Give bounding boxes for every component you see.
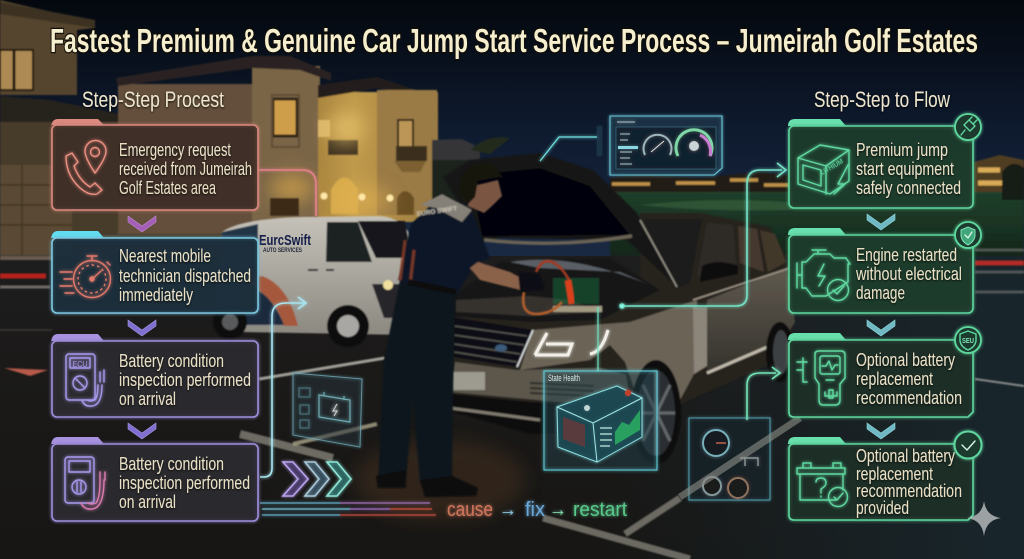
headlight bbox=[535, 330, 608, 355]
step text: Battery condition bbox=[119, 351, 224, 371]
van logo: AUTO SERVICES bbox=[263, 247, 302, 254]
road light streaks bbox=[0, 250, 1024, 559]
icon: engine with check bbox=[797, 250, 850, 300]
connector: hood to diagnostics panel bbox=[540, 137, 597, 161]
sparkle watermark bbox=[967, 501, 1001, 536]
icon: ECU multimeter bbox=[66, 354, 104, 406]
panel: optional battery recommendation provided bbox=[788, 432, 982, 520]
panel: optional battery replacement with scan tool bbox=[788, 327, 981, 417]
left column heading: Step-Step Procest bbox=[82, 87, 225, 112]
flow caption: cause fix restart: → bbox=[499, 498, 517, 521]
data stream lines bbox=[260, 503, 436, 515]
range rover with raised hood bbox=[412, 153, 795, 464]
connector: gauges to optional battery card bbox=[747, 367, 780, 420]
badge: plug bbox=[955, 114, 981, 140]
step text: Engine restarted bbox=[856, 245, 957, 265]
grille bbox=[452, 317, 533, 367]
arrow: right step 2 to 3 bbox=[867, 320, 895, 336]
panel: emergency request bbox=[51, 119, 258, 210]
icon: diagnostic scanner bbox=[797, 351, 845, 405]
central villa bbox=[116, 56, 510, 236]
step text bbox=[855, 245, 962, 303]
badge: SEU shield: SEU bbox=[962, 338, 974, 345]
step text: technician dispatched bbox=[119, 266, 251, 286]
step text: damage bbox=[856, 283, 905, 303]
panel: technician dispatched bbox=[51, 231, 258, 313]
step text: recommendation bbox=[856, 481, 962, 501]
step text: safely connected bbox=[856, 178, 961, 198]
car windows bbox=[643, 219, 786, 288]
step text bbox=[856, 446, 962, 518]
front wheel bbox=[631, 360, 681, 464]
HUD: left battery panel bbox=[293, 373, 362, 447]
step text bbox=[119, 351, 251, 409]
panel: jump start equipment bbox=[788, 114, 981, 208]
icon: battery with question mark bbox=[797, 463, 848, 506]
icon: multimeter with probes bbox=[65, 457, 105, 509]
icon: ECU multimeter: ECU bbox=[72, 359, 88, 369]
icon: stopwatch bbox=[60, 256, 110, 298]
golf course bbox=[610, 155, 1024, 262]
step text: on arrival bbox=[119, 492, 176, 512]
step text: Golf Estates area bbox=[119, 178, 217, 198]
flow caption: cause fix restart: restart bbox=[573, 498, 627, 521]
HUD: battery state of health panel: State Health bbox=[548, 373, 580, 383]
step text bbox=[856, 350, 962, 408]
HUD: engine diagnostics panel bbox=[597, 116, 722, 175]
step text: received from Jumeirah bbox=[119, 159, 252, 179]
step text bbox=[856, 140, 961, 198]
flow caption: cause fix restart: cause bbox=[447, 498, 493, 521]
badge: check mark bbox=[954, 432, 982, 458]
flow caption: cause fix restart: → bbox=[549, 498, 567, 521]
van logo: EurcSwift bbox=[259, 232, 311, 249]
step text: Optional battery bbox=[856, 446, 955, 466]
technician: EURO SWIFT bbox=[416, 205, 458, 218]
panel: battery inspection with multimeter bbox=[51, 437, 258, 521]
step text: replacement bbox=[856, 464, 933, 484]
direction chevrons bbox=[283, 462, 351, 496]
step text bbox=[119, 454, 250, 512]
step text bbox=[119, 246, 251, 305]
connector: engine bay to premium equipment card bbox=[598, 163, 786, 371]
step text: Optional battery bbox=[856, 350, 955, 370]
engine bay bbox=[452, 258, 660, 322]
step text: Emergency request bbox=[119, 140, 231, 160]
step text: inspection performed bbox=[119, 473, 250, 493]
badge: SEU shield bbox=[955, 327, 981, 353]
step text: Premium jump bbox=[856, 140, 948, 160]
technician bbox=[376, 163, 545, 497]
jump cables bbox=[523, 261, 572, 314]
HUD: gauges panel bbox=[689, 418, 770, 500]
arrow: step 1 to 2 bbox=[128, 216, 156, 232]
service van bbox=[213, 216, 414, 347]
step text: Nearest mobile bbox=[119, 246, 211, 266]
panel: battery inspection with ECU meter bbox=[51, 334, 258, 417]
arrow: step 2 to 3 bbox=[128, 320, 156, 336]
arrow: right step 3 to 4 bbox=[867, 423, 895, 439]
rear wheel bbox=[766, 322, 794, 382]
arrow: right step 1 to 2 bbox=[867, 214, 895, 230]
step text: immediately bbox=[119, 285, 193, 305]
icon: lithium battery bbox=[798, 145, 849, 194]
connector: request to van bbox=[258, 170, 316, 216]
badge: shield bbox=[955, 222, 981, 248]
icon: lithium battery: LITHIUM bbox=[820, 158, 845, 177]
raised hood bbox=[443, 153, 677, 287]
panel: engine restarted bbox=[788, 222, 981, 313]
step text: without electrical bbox=[855, 264, 962, 284]
asphalt ground bbox=[0, 256, 1024, 559]
van logo bbox=[259, 232, 311, 254]
step text: provided bbox=[856, 498, 909, 518]
icon: phone and location pin bbox=[66, 140, 106, 194]
step text: replacement bbox=[856, 369, 933, 389]
step text: on arrival bbox=[119, 389, 176, 409]
flow caption: cause fix restart: fix bbox=[525, 498, 546, 521]
step text: start equipment bbox=[856, 159, 954, 179]
step text: Battery condition bbox=[119, 454, 224, 474]
flow caption: cause fix restart bbox=[447, 498, 627, 521]
right column heading: Step-Step to Flow bbox=[814, 87, 951, 112]
arrow: step 3 to 4 bbox=[128, 423, 156, 439]
HUD: battery state of health panel bbox=[544, 371, 657, 470]
step text bbox=[119, 140, 252, 198]
left villa bbox=[0, 0, 240, 256]
step text: inspection performed bbox=[119, 370, 251, 390]
step text: recommendation bbox=[856, 388, 962, 408]
connector: inspection to van arrow bbox=[260, 297, 306, 477]
battery illustration bbox=[557, 386, 642, 462]
